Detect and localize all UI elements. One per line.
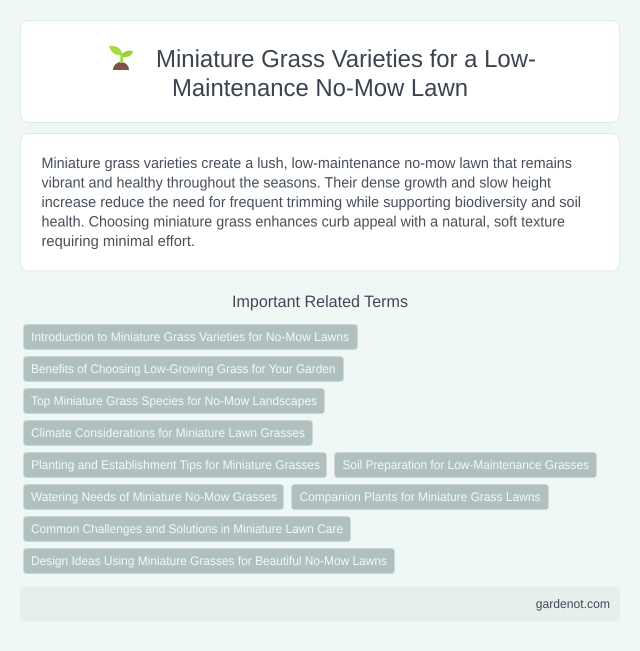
tag — [334, 452, 596, 478]
tag: Design Ideas Using Miniature Grasses for Beautiful No-Mow Lawns — [31, 554, 387, 568]
footer — [20, 587, 620, 621]
text block: description: health. Choosing miniature grass enhances curb appeal with a natural, soft texture — [42, 214, 565, 230]
tag: Introduction to Miniature Grass Varieties for No-Mow Lawns — [31, 330, 349, 344]
tag: Companion Plants for Miniature Grass Lawns — [300, 490, 540, 504]
tag — [24, 548, 394, 574]
panel: description — [20, 134, 620, 271]
tag: Watering Needs of Miniature No-Mow Grasses — [31, 490, 277, 504]
heading: important related terms: Important Related Terms — [232, 293, 408, 311]
tag: Soil Preparation for Low-Maintenance Grasses — [342, 458, 589, 472]
tag: Top Miniature Grass Species for No-Mow Landscapes — [31, 394, 317, 408]
tag — [24, 324, 358, 350]
tag — [24, 516, 350, 542]
tag: Benefits of Choosing Low-Growing Grass for Your Garden — [31, 362, 336, 376]
tag — [24, 420, 312, 446]
tag — [24, 388, 324, 414]
panel: related terms tags — [24, 324, 596, 574]
panel: title card — [20, 20, 620, 122]
tag: Planting and Establishment Tips for Miniature Grasses — [31, 458, 320, 472]
text block: description: increase reduce the need for frequent trimming while supporting biodiversity and soil — [42, 194, 581, 211]
tag — [24, 452, 326, 478]
tag: Common Challenges and Solutions in Miniature Lawn Care — [31, 522, 343, 536]
tag — [24, 484, 284, 510]
text block: description: requiring minimal effort. — [42, 233, 195, 250]
text block: description: Miniature grass varieties create a lush, low-maintenance no-mow lawn that remains — [42, 155, 572, 172]
text block: description — [42, 155, 581, 250]
tag: Climate Considerations for Miniature Lawn Grasses — [31, 426, 305, 440]
title: Miniature Grass Varieties for a Low- — [156, 46, 536, 73]
title — [156, 46, 536, 102]
footer: gardenot.com — [536, 597, 610, 611]
icon: seedling — [109, 46, 133, 70]
tag — [292, 484, 548, 510]
text block: description: vibrant and healthy throughout the seasons. Their dense growth and slow height — [42, 174, 552, 192]
tag — [24, 356, 344, 382]
title: Maintenance No-Mow Lawn — [172, 75, 468, 102]
